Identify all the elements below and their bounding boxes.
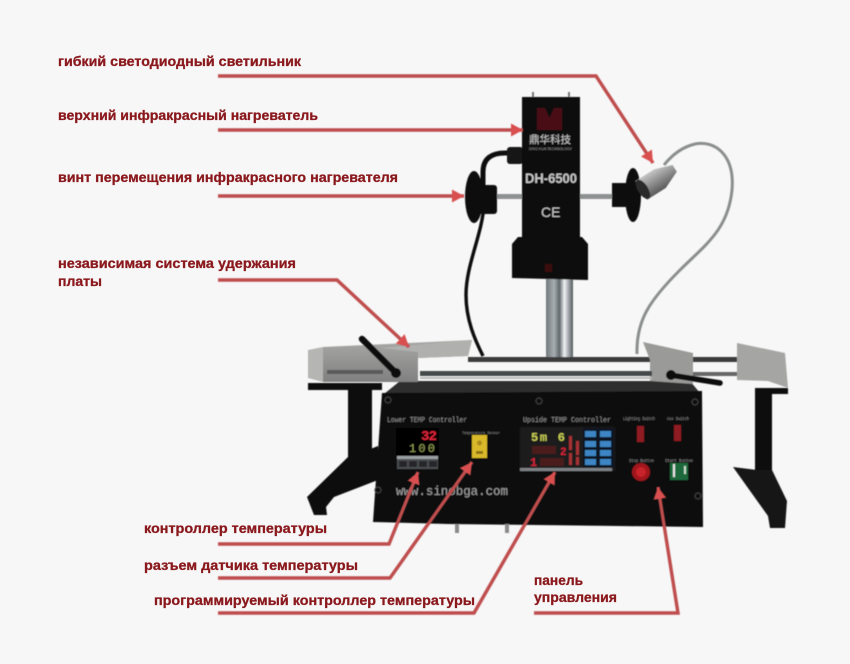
control box [373, 391, 703, 527]
machine: BGA rework station DH-6500 [307, 92, 788, 533]
cable to lamp [637, 143, 732, 354]
upside controller title: Upside TEMP Controller [523, 417, 611, 425]
left screw knob [465, 171, 497, 223]
right screw knob [612, 168, 641, 222]
right carriage [643, 342, 771, 384]
heater logo [537, 108, 562, 130]
left carriage [308, 340, 472, 382]
right leg [733, 388, 788, 528]
infrared heater head [512, 92, 588, 280]
label: control panel: управления [534, 589, 617, 605]
control switches and buttons: Aux Switch [667, 416, 689, 422]
flexible LED lamp head [633, 160, 681, 201]
chinese brand: 鼎华科技 [529, 133, 572, 146]
model name: DH-6500 [525, 170, 577, 186]
lower controller title: Lower TEMP Controller [387, 417, 467, 425]
programmable controller [520, 427, 615, 471]
label: temperature sensor socket: разъем датчика температуры [144, 557, 358, 573]
left leg [307, 383, 382, 515]
support column [546, 278, 573, 360]
upper cable [483, 153, 520, 190]
control switches and buttons [623, 416, 693, 481]
website text: www.sinobga.com [396, 484, 508, 499]
under-rail shadow [384, 381, 700, 394]
label: programmable temperature controller: программируемый контроллер температуры [154, 592, 475, 608]
temperature controller [396, 428, 439, 469]
temperature sensor socket [462, 431, 501, 458]
right end block [737, 343, 788, 388]
label: upper infrared heater: верхний инфракрасный нагреватель [58, 107, 318, 123]
front rail [420, 371, 652, 376]
programmable controller: 2 [560, 447, 567, 459]
programmable controller: 1 [530, 456, 537, 470]
temperature controller: 100 [409, 442, 435, 456]
control switches and buttons: Stop Button [629, 458, 654, 464]
arrow: control panel [534, 487, 678, 613]
control switches and buttons: Lighting Switch [623, 416, 655, 422]
arrow: temperature controller [218, 472, 418, 544]
CE mark: CE [541, 204, 560, 220]
programmable controller: 5m 6 [531, 431, 565, 445]
arrow: upper infrared heater [218, 128, 523, 132]
arrow: programmable temperature controller [218, 472, 555, 613]
label: heater movement screw: винт перемещения инфракрасного нагревателя [58, 169, 398, 185]
arrow: heater movement screw [218, 194, 464, 198]
black heater cable [466, 205, 484, 356]
right clamp handle [666, 370, 720, 383]
bottom connectors [455, 524, 509, 533]
panel screws [375, 397, 701, 499]
label: control panel: панель [534, 572, 583, 588]
arrow: temperature sensor socket [218, 462, 472, 578]
horizontal screw bar [495, 194, 615, 199]
brand subline: DING HUA TECHNOLOGY [529, 147, 573, 151]
label: independent board holding system: независимая система удержания [58, 255, 296, 271]
label: temperature controller: контроллер температуры [144, 520, 327, 536]
arrow: flexible LED light [218, 76, 653, 163]
rear rail [468, 357, 740, 362]
temperature controller: 32 [421, 429, 437, 445]
label: independent board holding system: платы [58, 273, 102, 289]
label: flexible LED light: гибкий светодиодный светильник [58, 53, 302, 69]
touch screen [583, 428, 614, 468]
control switches and buttons: Start Button [665, 458, 693, 464]
arrow: independent board holding system [218, 280, 409, 347]
cable connector [507, 147, 523, 164]
lower red indicator [545, 264, 552, 272]
left clamp handle [362, 339, 401, 378]
temperature sensor socket: Temperature Sensor [462, 431, 501, 436]
